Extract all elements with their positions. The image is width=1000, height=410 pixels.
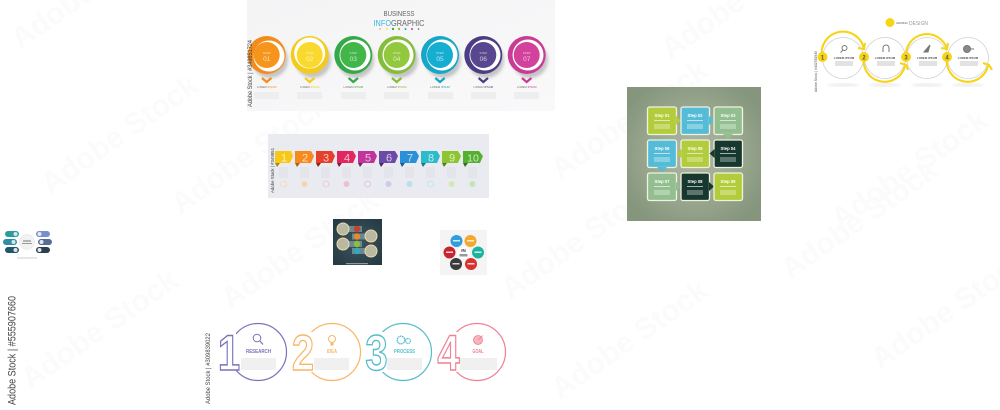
step labels	[834, 56, 979, 60]
shadows	[827, 84, 984, 86]
step 03	[334, 36, 374, 99]
step 01: STEP	[263, 51, 271, 55]
text placeholders	[835, 61, 978, 66]
stage 4 goal: GOAL	[472, 349, 484, 355]
step 09 card: Step 09	[721, 179, 736, 184]
panel: ten step tabs	[268, 134, 489, 198]
heading: infographic design: DESIGN	[909, 21, 928, 27]
watermark pattern: Adobe Stock	[825, 103, 994, 236]
stock label 2: Adobe Stock | #349851	[270, 148, 275, 193]
panel: dark hub diagram	[333, 219, 382, 265]
step 06: LOREM IPSUM	[474, 85, 494, 89]
tab 1: 1	[281, 152, 287, 164]
step 05: STEP	[436, 51, 444, 55]
step 07	[508, 36, 548, 99]
panel: seven step circles	[247, 0, 555, 111]
step 08 card: Step 08	[688, 179, 703, 184]
step 02: 02	[306, 56, 314, 63]
stage 1 research	[218, 324, 286, 381]
footer caption	[346, 263, 368, 264]
stage 3 process: 3	[365, 325, 388, 381]
tab 8	[421, 151, 440, 187]
panel: yellow arrows timeline	[813, 18, 992, 92]
step labels: LOREM IPSUM	[958, 56, 979, 60]
yellow arrows	[822, 32, 992, 82]
small nodes	[354, 226, 360, 254]
hub: IN	[461, 248, 466, 253]
step 06	[464, 36, 504, 99]
watermark pattern: Adobe Stock	[215, 183, 384, 316]
step 05: LOREM IPSUM	[430, 85, 450, 89]
right pills	[36, 231, 52, 253]
watermark pattern: Adobe Stock	[545, 273, 714, 406]
title: business infographic: INFOGRAPHIC	[374, 18, 424, 28]
step 04	[378, 36, 418, 99]
stage 3 process: PROCESS	[394, 349, 415, 355]
tab 9: 9	[449, 152, 455, 164]
tab 9	[442, 151, 461, 187]
stock label 4: Adobe Stock | #432783945	[813, 50, 818, 92]
watermark pattern: Adobe Stock	[545, 53, 714, 186]
petal circles	[444, 235, 484, 270]
stage 4 goal	[437, 324, 506, 381]
step 07 card: Step 07	[655, 179, 670, 184]
step 07: 07	[523, 56, 531, 63]
stage 2 idea: 2	[292, 325, 314, 381]
tab 5: 5	[365, 152, 371, 164]
tab 3	[316, 151, 335, 187]
step 07: LOREM IPSUM	[517, 85, 537, 89]
panel: nine step grid	[627, 87, 761, 221]
tab 10	[463, 151, 483, 187]
title dots	[379, 28, 419, 30]
tab 10: 10	[467, 152, 479, 164]
stock label 5: Adobe Stock | #309839022	[206, 332, 212, 404]
step 01 card: Step 01	[655, 113, 670, 118]
gray circles	[822, 38, 988, 78]
stage 3 process	[365, 324, 432, 381]
hub	[20, 234, 34, 250]
caption	[17, 258, 37, 259]
watermark pattern: Adobe Stock	[495, 173, 664, 306]
step 01: 01	[263, 56, 271, 63]
tab 6	[379, 151, 398, 187]
step 05: 05	[436, 56, 444, 63]
tab 3: 3	[323, 152, 329, 164]
tab 7: 7	[407, 152, 413, 164]
number badges: 1	[821, 56, 825, 62]
tab 6: 6	[386, 152, 392, 164]
connectors	[343, 229, 371, 251]
left pills	[3, 231, 19, 253]
petal labels	[446, 240, 482, 264]
title: business infographic	[374, 11, 424, 28]
step 04: STEP	[393, 51, 401, 55]
step 01	[248, 36, 288, 99]
step 04: 04	[393, 56, 401, 63]
step 02: STEP	[306, 51, 314, 55]
large nodes	[337, 223, 377, 257]
step 04: LOREM IPSUM	[387, 85, 407, 89]
watermark pattern: Adobe Stock	[35, 68, 204, 201]
tab 1	[275, 151, 293, 187]
heading: infographic design	[886, 18, 928, 27]
panel: six pill diagram	[3, 231, 52, 258]
step 05	[421, 36, 461, 99]
step 01: LOREM IPSUM	[257, 85, 277, 89]
step 03 card: Step 03	[721, 113, 736, 118]
step 07: STEP	[523, 51, 531, 55]
step 02 card: Step 02	[688, 113, 703, 118]
step 03: 03	[350, 56, 357, 63]
stage 1 research: 1	[218, 325, 240, 381]
stage 4 goal: 4	[437, 325, 460, 381]
number badges: 2	[862, 56, 866, 62]
tab 4	[337, 151, 356, 187]
step 06: STEP	[479, 51, 487, 55]
number badges	[818, 52, 952, 62]
step 03: LOREM IPSUM	[344, 85, 364, 89]
step 05 card: Step 05	[688, 146, 703, 151]
step 03: STEP	[349, 51, 357, 55]
tab 2	[295, 151, 314, 187]
tab 8: 8	[428, 152, 434, 164]
number badges: 3	[904, 56, 908, 62]
heading: infographic design: GRAPHIC	[896, 21, 908, 25]
step icons	[840, 45, 974, 52]
tab 4: 4	[344, 152, 350, 164]
title: business infographic: BUSINESS	[384, 11, 415, 18]
watermark pattern: Adobe Stock	[165, 88, 334, 221]
stock label: left edge: Adobe Stock | #555907660	[6, 296, 18, 405]
panel: circular people diagram	[440, 230, 487, 275]
number badges: 4	[945, 56, 949, 62]
tab 2: 2	[302, 152, 308, 164]
panel: research idea process goal	[206, 324, 506, 404]
tab 7	[400, 151, 419, 187]
step 04 card: Step 04	[721, 146, 736, 151]
step labels: LOREM IPSUM	[834, 56, 855, 60]
step labels: LOREM IPSUM	[917, 56, 938, 60]
stock label 1: Adobe Stock | #349851724	[248, 39, 254, 107]
stage 2 idea	[292, 324, 360, 381]
tab 5	[358, 151, 377, 187]
step 06 card: Step 06	[655, 146, 670, 151]
stage 1 research: RESEARCH	[246, 349, 271, 355]
step labels: LOREM IPSUM	[875, 56, 896, 60]
watermark pattern: Adobe Stock	[775, 153, 944, 286]
watermark pattern: Adobe Stock	[15, 263, 184, 396]
step 02: LOREM IPSUM	[300, 85, 320, 89]
step 06: 06	[480, 56, 487, 63]
step 02	[291, 36, 331, 99]
stage 2 idea: IDEA	[327, 349, 337, 355]
